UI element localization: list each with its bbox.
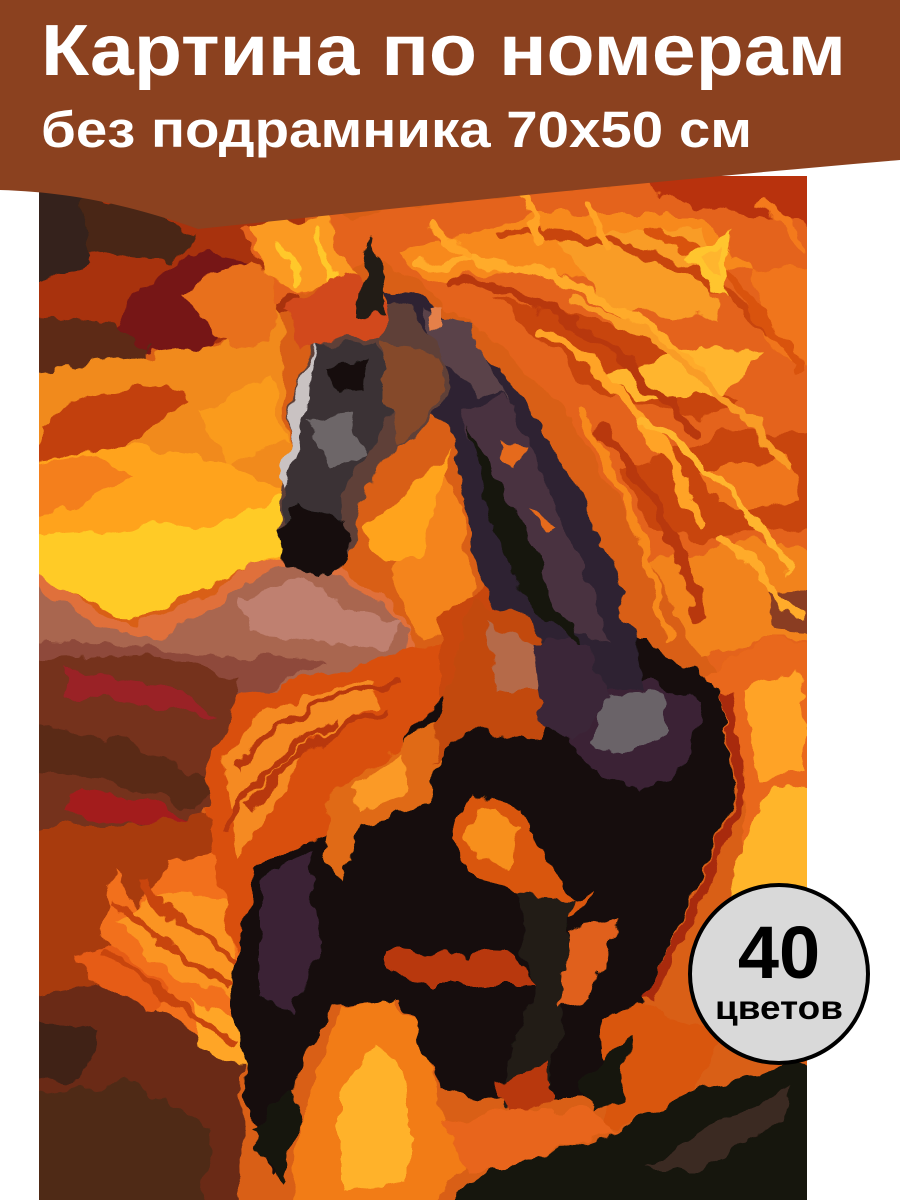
neck highlights xyxy=(420,305,610,650)
painting background xyxy=(68,186,807,1200)
chest xyxy=(430,600,610,760)
horse body xyxy=(230,640,742,1180)
badge: 40 colours xyxy=(690,885,868,1063)
flames lower left xyxy=(74,852,248,1066)
mane flames along the back and lower left body xyxy=(204,448,500,954)
horse head xyxy=(277,240,450,578)
mane streaks xyxy=(280,190,805,640)
subtitle: без подрамника 70х50 см xyxy=(41,101,752,158)
sky: clouds on the left xyxy=(39,192,305,620)
mountains xyxy=(39,559,415,694)
neck xyxy=(385,285,645,690)
painting: fire horse xyxy=(39,176,807,1200)
title: Картина по номерам xyxy=(41,11,846,91)
header banner xyxy=(0,0,900,229)
flames on the upper right xyxy=(240,176,807,896)
badge: 40 colours: цветов xyxy=(715,989,843,1026)
ground bottom right xyxy=(252,999,807,1200)
badge: 40 colours: 40 xyxy=(738,911,820,994)
lower left dark fields xyxy=(39,652,246,1200)
